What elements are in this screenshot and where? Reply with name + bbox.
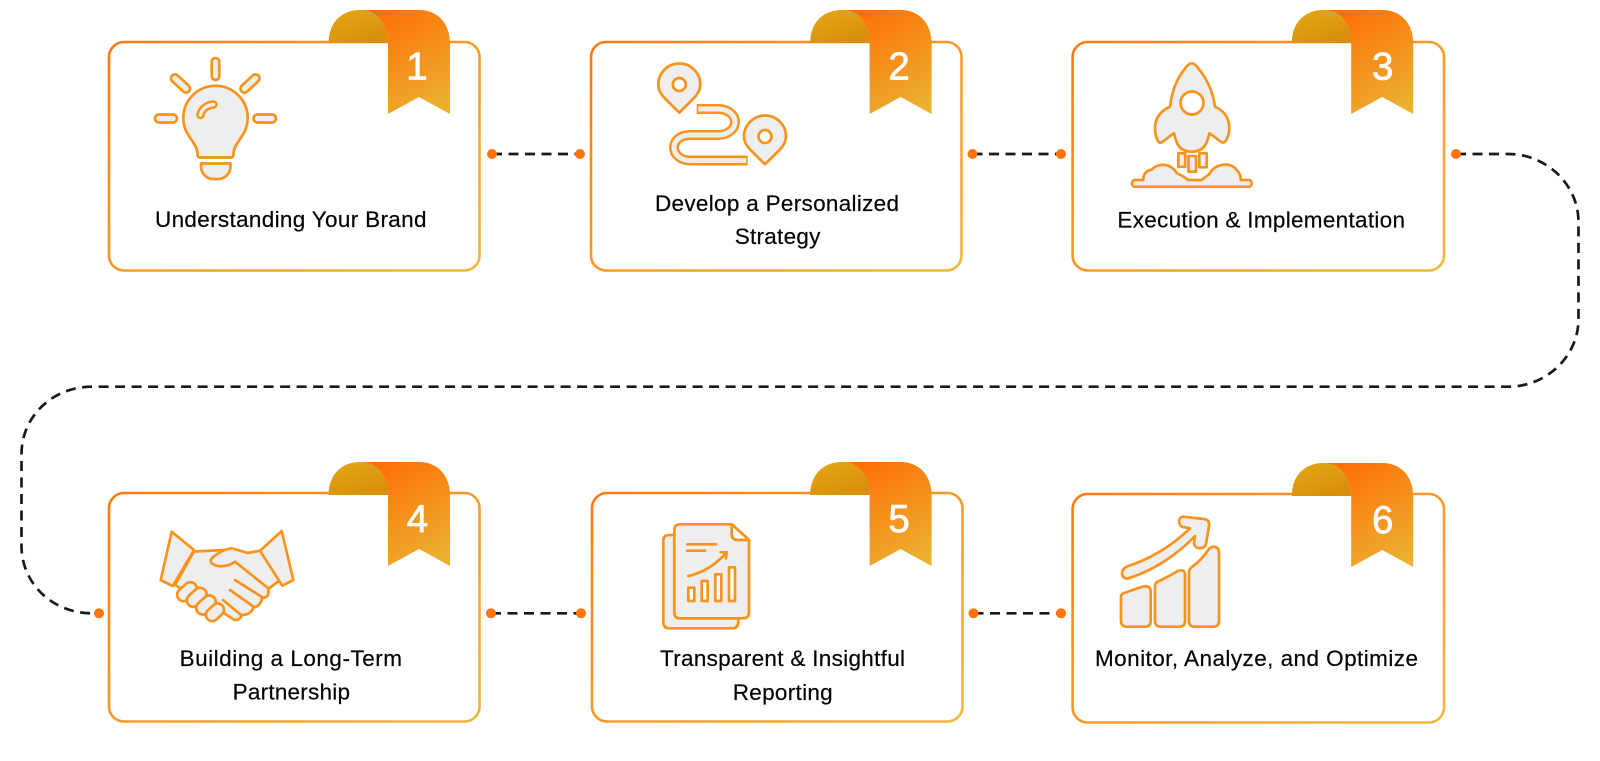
icon: growth chart with arrow	[1121, 517, 1219, 627]
ribbon: number 6	[1292, 463, 1413, 567]
panel: step 3	[1073, 10, 1444, 270]
label: step 6: Monitor, Analyze, and Optimize	[1095, 646, 1418, 671]
ribbon: number 3: 3	[1372, 46, 1393, 88]
ribbon: number 2	[810, 10, 932, 114]
label: step 2: Strategy	[735, 224, 821, 249]
panel: step 6	[1073, 463, 1444, 722]
panel: step 1	[109, 10, 480, 270]
icon: handshake	[161, 531, 293, 624]
ribbon: number 2: 2	[888, 46, 910, 88]
ribbon: number 6: 6	[1372, 499, 1393, 542]
label: step 5: Transparent & Insightful	[660, 646, 905, 671]
panel: step 5	[592, 462, 962, 722]
label: step 2	[655, 191, 899, 249]
label: step 5	[660, 646, 905, 705]
label: step 1: Understanding Your Brand	[155, 207, 426, 232]
ribbon: number 4: 4	[407, 498, 428, 541]
connector: step 1 to 2	[487, 149, 585, 159]
label: step 5: Reporting	[733, 680, 833, 705]
ribbon: number 3	[1292, 10, 1413, 114]
panel: step 4	[109, 462, 480, 722]
label: step 2: Develop a Personalized	[655, 191, 899, 216]
connector: step 3 to 4	[22, 149, 1578, 618]
label: step 4: Partnership	[233, 680, 350, 704]
label: step 3: Execution & Implementation	[1117, 208, 1405, 232]
ribbon: number 1: 1	[406, 46, 428, 88]
connector: step 2 to 3	[968, 149, 1066, 159]
icon: route with map pins	[658, 64, 786, 164]
ribbon: number 4	[329, 462, 450, 566]
label: step 4: Building a Long-Term	[180, 646, 402, 671]
ribbon: number 1	[329, 10, 450, 114]
icon: light bulb	[155, 58, 276, 179]
icon: report document	[663, 524, 749, 628]
label: step 4	[180, 646, 402, 704]
ribbon: number 5: 5	[888, 498, 910, 541]
connector: step 5 to 6	[968, 608, 1066, 618]
ribbon: number 5	[810, 462, 932, 566]
panel: step 2	[591, 10, 962, 270]
connector: step 4 to 5	[486, 608, 586, 618]
icon: rocket launch	[1132, 63, 1252, 187]
